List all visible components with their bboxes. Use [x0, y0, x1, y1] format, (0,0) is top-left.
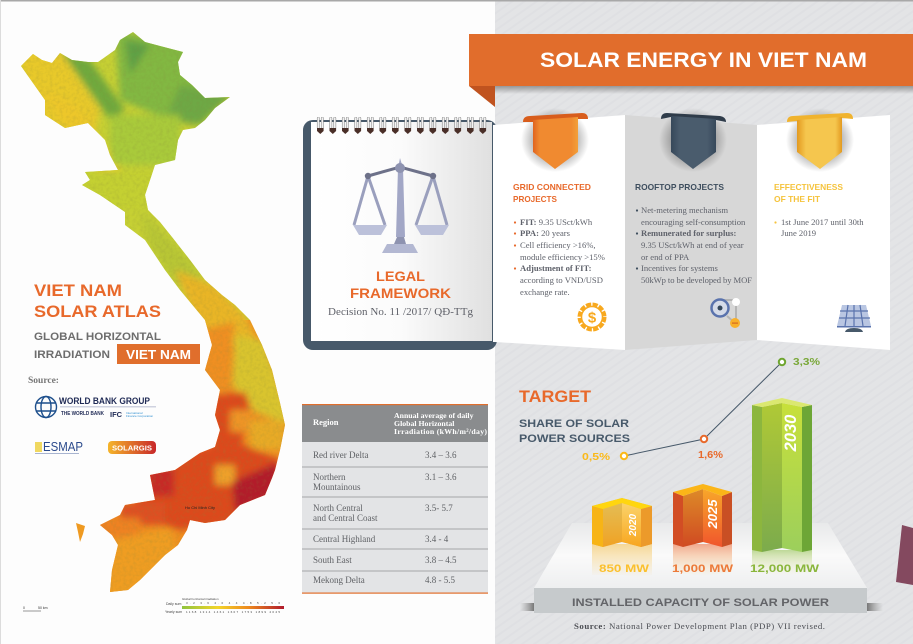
- icon: net meter: [712, 298, 740, 328]
- table rows: 3.4 – 3.6: [425, 450, 457, 460]
- table: irradiation by region: [302, 404, 488, 594]
- ribbon: slate: [659, 108, 727, 172]
- panel: grid connected projects: PROJECTS: [513, 194, 557, 204]
- source logos: [28, 376, 156, 454]
- decorative page corner: [896, 525, 913, 585]
- table rows: 3.8 – 4.5: [425, 555, 457, 565]
- map legend: Global horizontal irradiation: [182, 597, 219, 601]
- capacity labels: 850 MW: [599, 563, 650, 575]
- bullet list: 1st June 2017 until 30th: [781, 217, 864, 227]
- source logos: SOLARGIS: [112, 444, 152, 452]
- bullet list: Net-metering mechanism: [641, 205, 728, 215]
- heading: GRID CONNECTED: [513, 182, 591, 192]
- icon: World Bank globe: [36, 396, 56, 418]
- icon: dollar gear: $: [588, 310, 597, 326]
- table rows: and Central Coast: [313, 513, 378, 523]
- bar 2020: [592, 498, 652, 577]
- table rows: South East: [313, 555, 352, 565]
- bullet list: module efficiency >15%: [520, 252, 605, 262]
- heading: legal framework: LEGAL: [376, 268, 425, 284]
- capacity labels: [599, 563, 820, 575]
- table rows: 3.1 – 3.6: [425, 472, 457, 482]
- panel: effectiveness of the FIT: OF THE FIT: [774, 194, 820, 204]
- panel: effectiveness of the FIT: [757, 108, 890, 350]
- notebook: legal framework: FRAMEWORK: [350, 285, 451, 301]
- island: [76, 523, 85, 542]
- bar 2025: 2025: [705, 499, 720, 529]
- panel: rooftop projects: [625, 108, 757, 350]
- target heading: TARGET: [519, 387, 592, 406]
- bar 2020: 2020: [628, 513, 639, 537]
- bullet list: [514, 217, 605, 297]
- map legend: 3.2 3.6 4.0 4.4 4.8 5.2 5.6: [186, 601, 280, 605]
- line chart: share of solar power: [582, 357, 820, 463]
- source logos: Source:: [28, 376, 59, 386]
- source logos: Finance Corporation: [126, 414, 154, 418]
- bullet list: or end of PPA: [641, 252, 690, 262]
- chart source note: Source: National Power Development Plan (PDP) VII revised.: [574, 621, 825, 631]
- city label on map: Ho Chi Minh City: [185, 505, 215, 510]
- source logos: WORLD BANK GROUP: [59, 396, 151, 407]
- bullet list: 9.35 USct/kWh at end of year: [641, 240, 744, 250]
- ribbon: yellow: [786, 108, 854, 172]
- capacity labels: 12,000 MW: [750, 563, 820, 575]
- target heading: SHARE OF SOLAR: [519, 418, 629, 430]
- heading: EFFECTIVENESS: [774, 182, 843, 192]
- table rows: 3.5- 5.7: [425, 503, 453, 513]
- map: Viet Nam solar irradiation: [21, 32, 285, 592]
- map scale bar: 50 km: [38, 606, 48, 610]
- ribbon: orange: [521, 108, 589, 172]
- table rows: Mountainous: [313, 482, 361, 492]
- table rows: [313, 450, 457, 585]
- table rows: Red river Delta: [313, 450, 368, 460]
- line chart: share of solar power: 1,6%: [698, 450, 723, 461]
- bullet list: June 2019: [781, 228, 816, 238]
- table rows: Northern: [313, 472, 346, 482]
- title banner: [469, 34, 913, 107]
- map scale bar: [23, 606, 48, 611]
- bullet list: according to VND/USD: [520, 275, 603, 285]
- notebook: legal framework: [303, 117, 497, 350]
- table header: [313, 411, 487, 436]
- bullet list: [774, 217, 864, 238]
- source logos: ESMAP: [43, 440, 83, 454]
- heading: ROOFTOP PROJECTS: [635, 182, 724, 192]
- title block: Viet Nam Solar Atlas: [34, 282, 200, 364]
- bar 2030: 2030: [782, 414, 800, 452]
- map legend: Daily sum: [166, 602, 181, 606]
- bullet list: 50kWp to be developed by MOF: [641, 275, 752, 285]
- notebook spiral rings: [314, 117, 489, 134]
- bullet list: FIT: 9.35 USct/kWh: [520, 217, 593, 227]
- title block: Viet Nam Solar Atlas: IRRADIATION: [34, 349, 110, 361]
- capacity labels: 1,000 MW: [672, 563, 734, 575]
- icon: solar panel: [837, 305, 871, 332]
- table header: Irradiation (kWh/m²/day): [394, 427, 487, 436]
- bullet list: [636, 205, 752, 285]
- title banner: SOLAR ENERGY IN VIET NAM: [540, 49, 867, 72]
- map legend: 1168 1314 1461 1607 1753 1899 2045: [186, 610, 280, 614]
- map legend: [165, 597, 284, 614]
- target heading: [519, 387, 630, 445]
- decision reference: Decision No. 11 /2017/ QĐ-TTg: [328, 306, 474, 318]
- platform: installed capacity: INSTALLED CAPACITY OF SOLAR POWER: [572, 597, 829, 609]
- icon: dollar gear: [580, 305, 604, 329]
- title block: Viet Nam Solar Atlas: VIET NAM: [34, 282, 122, 300]
- bullet list: exchange rate.: [520, 287, 570, 297]
- source logos: IFC: [110, 410, 123, 419]
- bullet list: PPA: 20 years: [520, 228, 571, 238]
- table header: Region: [313, 417, 339, 427]
- table rows: North Central: [313, 503, 363, 513]
- platform: installed capacity: [520, 523, 883, 613]
- table rows: Mekong Delta: [313, 575, 365, 585]
- bullet list: Cell efficiency >16%,: [520, 240, 596, 250]
- target heading: POWER SOURCES: [519, 433, 630, 445]
- source logos: THE WORLD BANK: [61, 411, 104, 417]
- map legend: Yearly sum: [165, 610, 182, 614]
- table header: Annual average of daily: [394, 411, 474, 420]
- bullet list: Remunerated for surplus:: [641, 228, 736, 238]
- bullet list: Adjustment of FIT:: [520, 263, 592, 273]
- bar 2030: [752, 398, 812, 576]
- panel: grid connected projects: [493, 108, 625, 350]
- source logos: International: [126, 411, 143, 415]
- title block: Viet Nam Solar Atlas: GLOBAL HORIZONTAL: [34, 331, 161, 343]
- table header: Global Horizontal: [394, 419, 455, 428]
- map scale bar: 0: [23, 606, 25, 610]
- bullet list: encouraging self-consumption: [641, 217, 746, 227]
- line chart: share of solar power: 0,5%: [582, 452, 610, 463]
- table rows: 4.8 - 5.5: [425, 575, 455, 585]
- table rows: Central Highland: [313, 534, 376, 544]
- bullet list: Incentives for systems: [641, 263, 719, 273]
- table rows: 3.4 - 4: [425, 534, 449, 544]
- icon: scales of justice: [353, 158, 449, 253]
- title block: Viet Nam Solar Atlas: SOLAR ATLAS: [34, 303, 161, 321]
- line chart: share of solar power: 3,3%: [793, 357, 820, 368]
- bar 2025: [673, 484, 732, 576]
- title block: Viet Nam Solar Atlas: VIET NAM: [126, 347, 191, 362]
